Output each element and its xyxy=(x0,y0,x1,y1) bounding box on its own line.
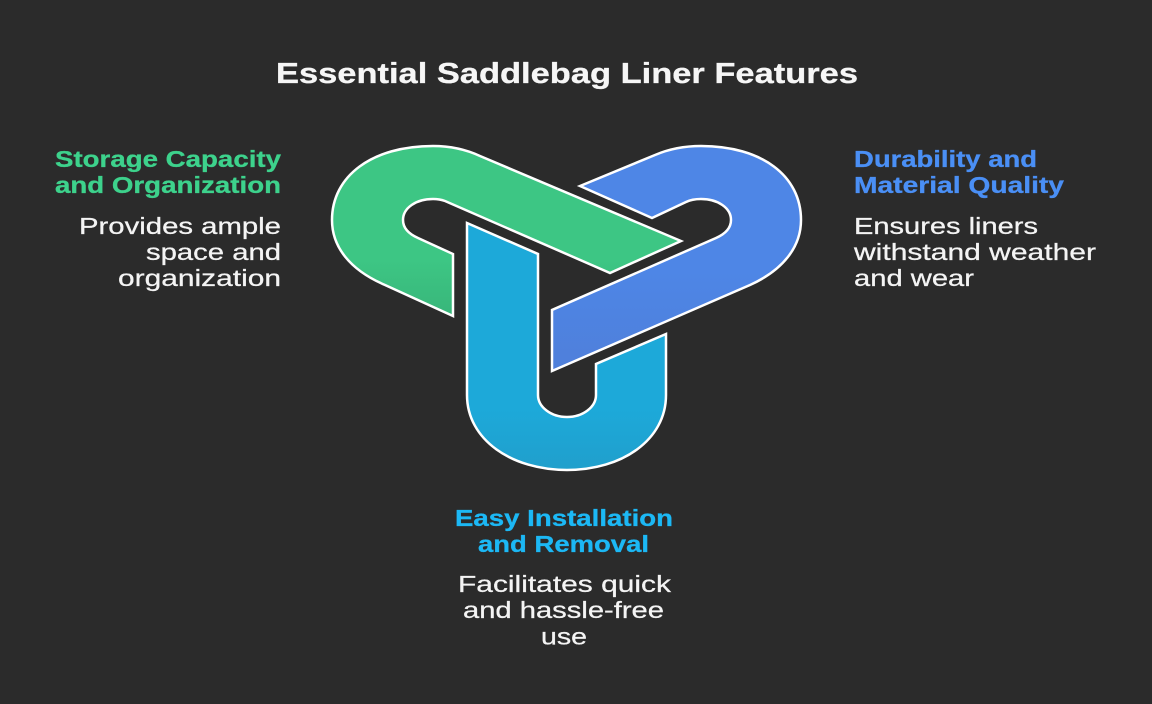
title: Essential Saddlebag Liner Features xyxy=(276,58,858,90)
text: installation description: Facilitates quick xyxy=(458,571,672,597)
text: installation description: use xyxy=(541,624,587,650)
heading: storage capacity: Storage Capacity xyxy=(55,146,281,172)
heading: easy installation: Easy Installation xyxy=(455,505,673,531)
text: storage description xyxy=(79,213,281,291)
text: durability description: withstand weather xyxy=(853,239,1096,265)
heading: durability: Material Quality xyxy=(854,172,1064,198)
text: durability description xyxy=(853,213,1096,291)
heading: easy installation: and Removal xyxy=(478,531,649,557)
icon: cyan link xyxy=(467,223,666,470)
icon: green link xyxy=(332,146,681,316)
heading: storage capacity xyxy=(55,146,281,198)
text: installation description xyxy=(458,571,672,650)
text: storage description: Provides ample xyxy=(79,213,281,239)
heading: durability xyxy=(854,146,1064,198)
heading: easy installation xyxy=(455,505,673,557)
text: storage description: organization xyxy=(118,265,281,291)
knot diagram xyxy=(332,146,801,470)
panel: storage capacity xyxy=(55,146,281,291)
heading: storage capacity: and Organization xyxy=(55,172,281,198)
icon: blue link xyxy=(552,146,801,371)
text: durability description: and wear xyxy=(854,265,974,291)
text: installation description: and hassle-free xyxy=(463,597,664,623)
panel: durability xyxy=(853,146,1096,291)
text: storage description: space and xyxy=(146,239,281,265)
text: durability description: Ensures liners xyxy=(854,213,1038,239)
heading: durability: Durability and xyxy=(854,146,1037,172)
panel: easy installation xyxy=(455,505,673,650)
